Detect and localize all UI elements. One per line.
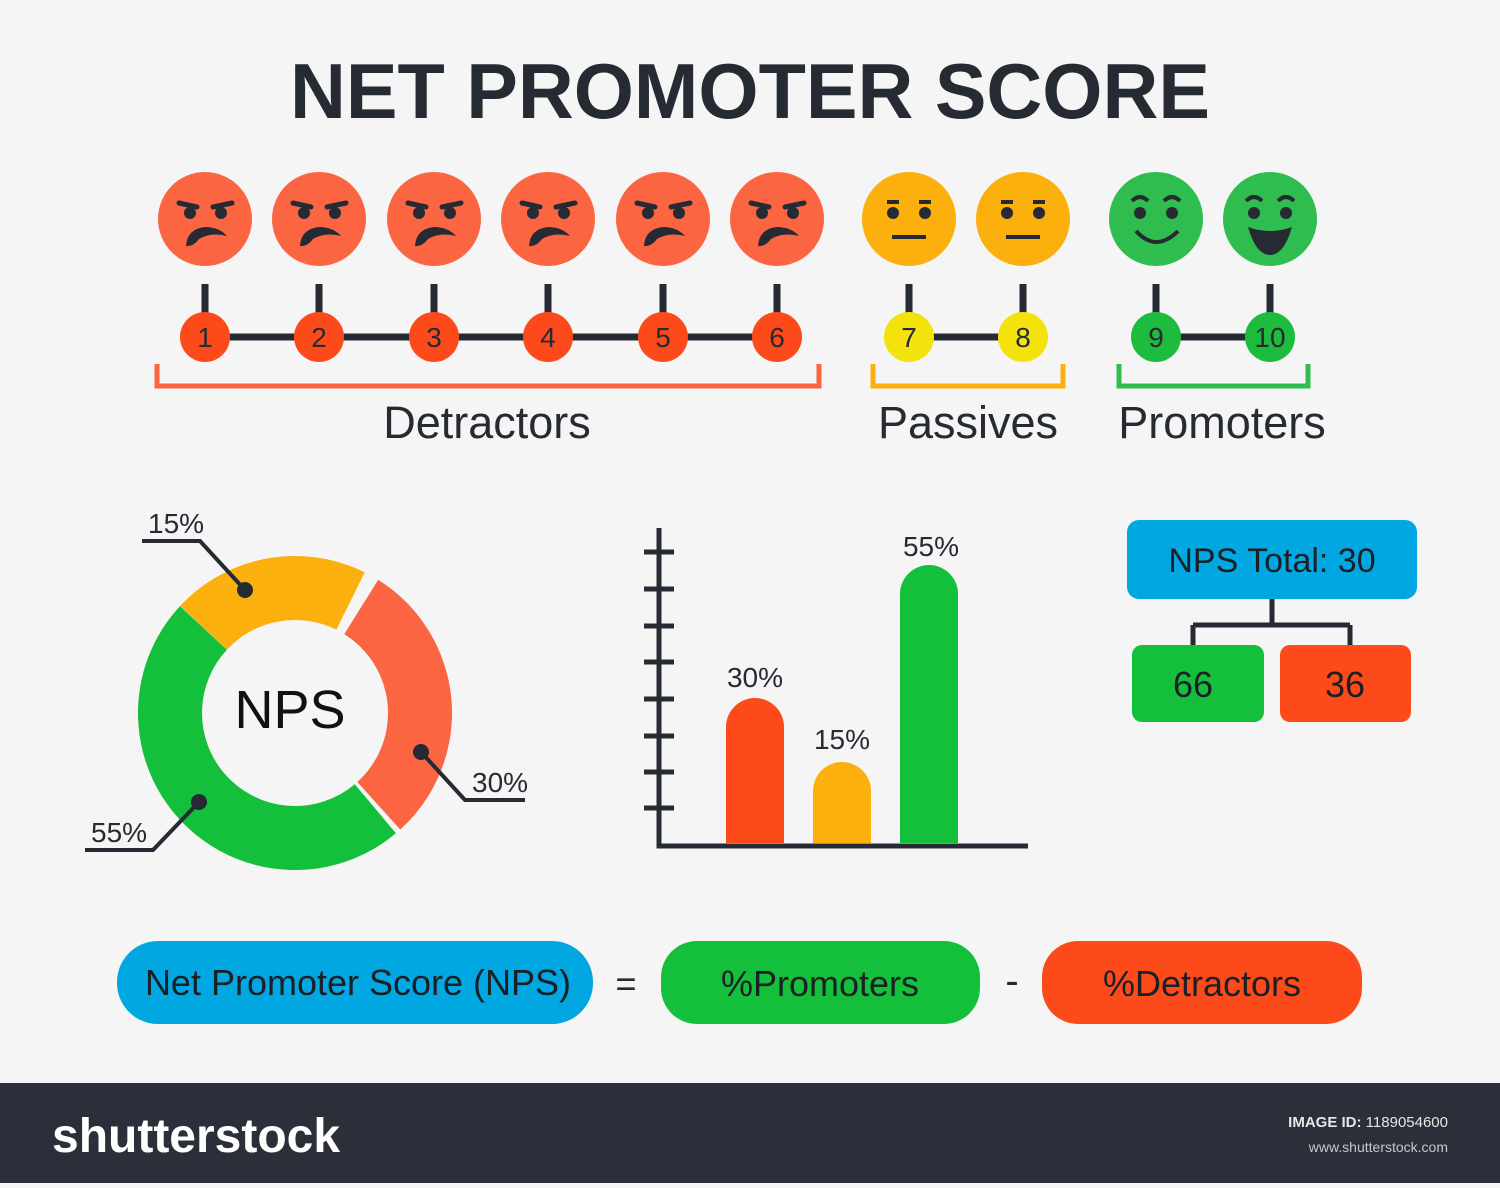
- footer: www.shutterstock.com: [1308, 1139, 1448, 1155]
- bracket: promoters: [1118, 364, 1326, 448]
- donut chart: 55%: [91, 817, 147, 848]
- number circles: 4: [540, 322, 556, 353]
- NPS total tree: 66: [1173, 664, 1213, 705]
- NPS total tree: [1127, 520, 1417, 722]
- donut chart: 30%: [472, 767, 528, 798]
- bracket: passives: [873, 364, 1063, 448]
- number circles: 1: [197, 322, 213, 353]
- footer: IMAGE ID: 1189054600: [1288, 1114, 1448, 1131]
- connector lines: [205, 284, 1270, 337]
- bar chart: 55%: [903, 531, 959, 562]
- angry faces: [158, 172, 824, 266]
- NPS total tree: NPS Total: 30: [1168, 542, 1376, 580]
- title: NET PROMOTER SCORE: [290, 47, 1210, 135]
- bracket: promoters: Promoters: [1118, 397, 1326, 448]
- bracket: detractors: Detractors: [383, 397, 591, 448]
- number circles: 6: [769, 322, 785, 353]
- happy faces: [1109, 172, 1317, 266]
- leader lines: [85, 541, 525, 850]
- number circles: 5: [655, 322, 671, 353]
- number circles: 10: [1254, 322, 1286, 353]
- formula: =: [615, 963, 637, 1004]
- formula: %Detractors: [1103, 963, 1301, 1004]
- bar chart: 30%: [727, 662, 783, 693]
- bracket: detractors: [157, 364, 819, 448]
- number circles: 9: [1148, 322, 1164, 353]
- formula: -: [1005, 959, 1019, 1003]
- number circles: [180, 312, 1295, 362]
- formula: Net Promoter Score (NPS): [145, 962, 571, 1003]
- scale: faces and numbers: [158, 172, 1317, 362]
- number circles: 7: [901, 322, 917, 353]
- footer: [0, 1083, 1500, 1183]
- number circles: 2: [311, 322, 327, 353]
- number circles: 8: [1015, 322, 1031, 353]
- NPS total tree: 36: [1325, 664, 1365, 705]
- donut chart: [85, 508, 528, 890]
- formula: %Promoters: [721, 963, 919, 1004]
- bracket: passives: Passives: [878, 397, 1058, 448]
- donut chart: NPS: [234, 680, 346, 740]
- bar chart: 15%: [814, 724, 870, 755]
- donut chart: 15%: [148, 508, 204, 539]
- neutral faces: [862, 172, 1070, 266]
- number circles: 3: [426, 322, 442, 353]
- bar chart: [644, 528, 1028, 846]
- footer: shutterstock: [52, 1110, 340, 1163]
- formula: [117, 941, 1362, 1024]
